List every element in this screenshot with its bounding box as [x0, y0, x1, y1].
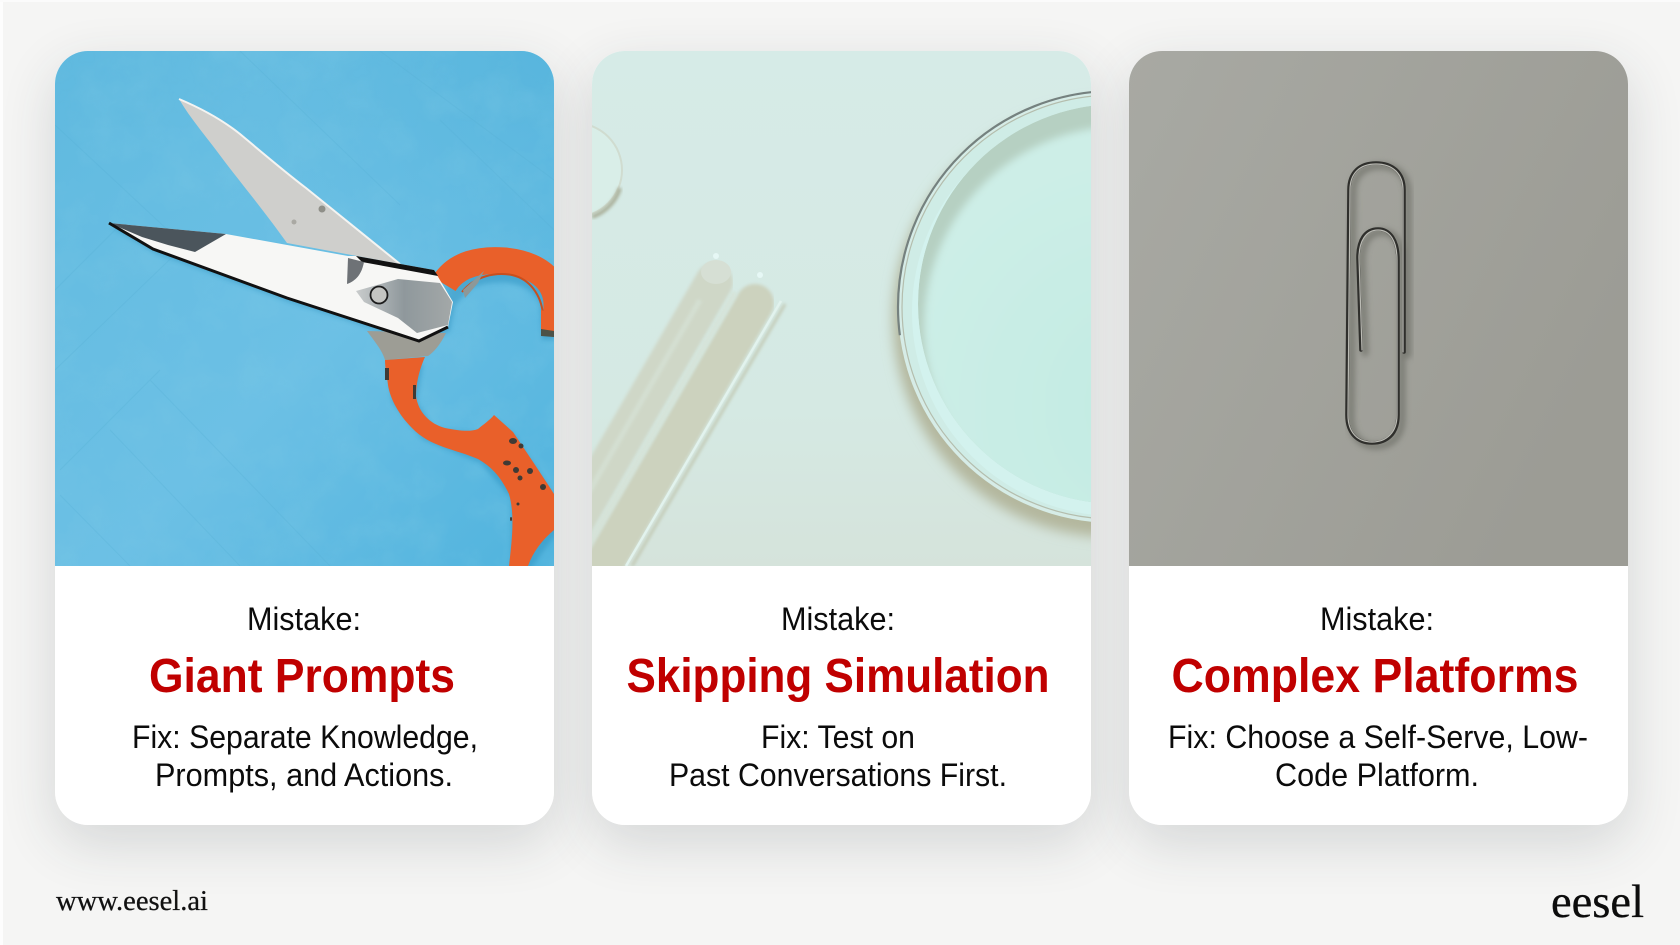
upper blade [179, 99, 400, 264]
logo: eesel: eesel [1551, 876, 1644, 928]
panel: card skipping simulation [592, 51, 1091, 825]
website url: www.eesel.ai [56, 885, 208, 917]
caption: complex platforms [1168, 601, 1588, 793]
label: mistake: Mistake: [781, 601, 895, 637]
text: fix: Fix: Choose a Self-Serve, Low- [1168, 719, 1588, 755]
panel: card giant prompts [55, 51, 554, 825]
text: fix: Code Platform. [1275, 757, 1479, 793]
test tubes [524, 253, 785, 631]
scissors [109, 99, 557, 570]
photo: petri dish and test tubes [592, 51, 1091, 566]
pivot screw [370, 286, 388, 304]
heading: complex platforms: Complex Platforms [1172, 650, 1578, 703]
photo: orange scissors on blue [55, 51, 554, 566]
lower blade [109, 223, 453, 340]
label: mistake: Mistake: [1320, 601, 1434, 637]
heading: giant prompts: Giant Prompts [149, 650, 455, 703]
petri dish [886, 91, 1091, 542]
photo: paper clip on gray [1129, 51, 1628, 566]
text: fix: Past Conversations First. [669, 757, 1007, 793]
lower handle [385, 357, 554, 566]
text: fix: Prompts, and Actions. [155, 757, 453, 793]
small dish [528, 123, 622, 217]
caption: skipping simulation [626, 601, 1050, 793]
text: fix: Fix: Test on [761, 719, 915, 755]
text: fix [669, 719, 1007, 793]
upper loop handle [444, 261, 557, 336]
label: mistake: Mistake: [247, 601, 361, 637]
lower heel [367, 331, 446, 360]
caption: giant prompts [132, 601, 478, 793]
text: fix [1168, 719, 1588, 793]
paper clip [1347, 163, 1408, 446]
panel: card complex platforms [1129, 51, 1628, 825]
heading: skipping simulation: Skipping Simulation [626, 650, 1050, 703]
text: fix: Fix: Separate Knowledge, [132, 719, 478, 755]
text: fix [132, 719, 478, 793]
